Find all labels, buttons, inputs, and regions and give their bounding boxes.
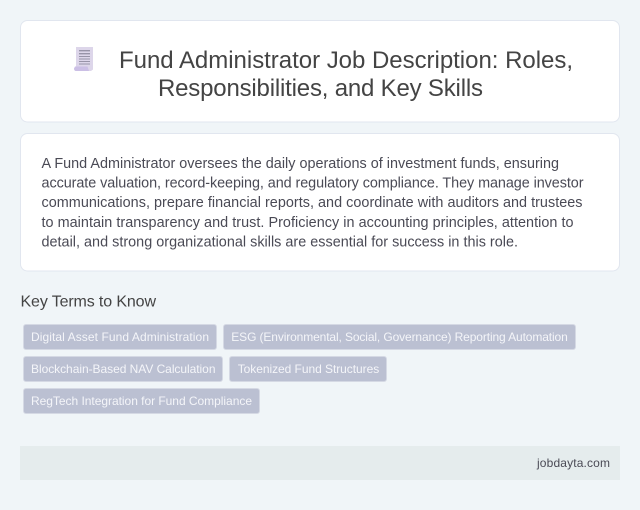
tag list [24,324,576,414]
description text [42,156,584,250]
tag: blockchain [24,356,222,382]
title [119,47,573,102]
description text: accurate valuation, record-keeping, and regulatory compliance. They manage investor [42,176,584,192]
description text: to maintain transparency and trust. Proficiency in accounting principles, attention to [42,215,574,231]
tag: digital asset [24,324,216,350]
footer: jobdayta.com [536,456,610,470]
description text: communications, prepare financial reports, and coordinate with auditors and trustees [42,195,582,211]
heading: key terms: Key Terms to Know [20,294,156,310]
title: Fund Administrator Job Description: Roles, [119,47,573,74]
tag: ESG: ESG (Environmental, Social, Governance) Reporting Automation [231,330,568,344]
tag: regtech [24,388,260,414]
panel: title card [20,20,620,122]
tag: tokenized: Tokenized Fund Structures [238,362,379,376]
title: Responsibilities, and Key Skills [158,75,483,102]
tag: ESG [224,324,576,350]
tag: regtech: RegTech Integration for Fund Compliance [31,394,252,408]
tag: tokenized [230,356,386,382]
description text: A Fund Administrator oversees the daily operations of investment funds, ensuring [42,156,559,172]
icon: document receipt [74,47,93,71]
description text: detail, and strong organizational skills are essential for success in this role. [42,234,518,250]
footer [20,446,620,480]
tag: digital asset: Digital Asset Fund Administration [31,330,209,344]
panel: description card [20,134,620,271]
tag: blockchain: Blockchain-Based NAV Calculation [31,362,216,376]
